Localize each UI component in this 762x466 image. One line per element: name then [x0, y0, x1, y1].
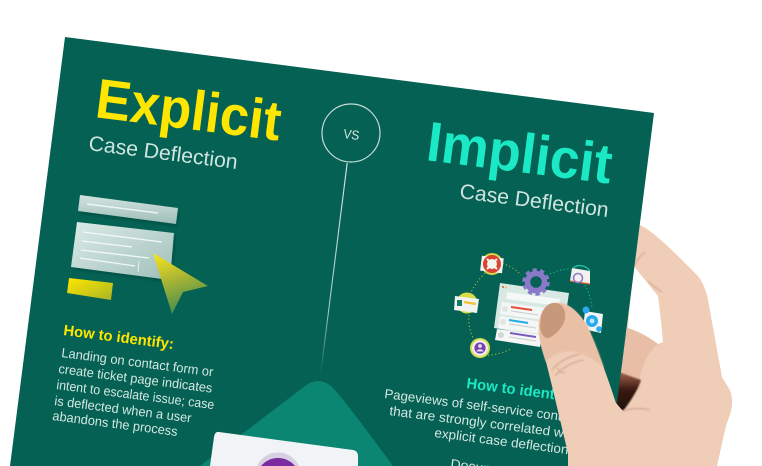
badge: user	[470, 338, 490, 358]
VS circle and divider	[320, 104, 380, 375]
icon: gear	[524, 270, 548, 294]
text block: left description: Landing on contact form or	[61, 345, 215, 379]
VS circle and divider: VS	[343, 126, 361, 143]
title: Implicit: Implicit	[423, 109, 616, 196]
text block: left description: abandons the process	[52, 408, 179, 439]
text block: right description: Pageviews of self-service content	[384, 386, 581, 426]
icon: implicit hub with badges	[454, 253, 603, 358]
text block: right description: explicit case deflection	[434, 425, 569, 457]
subtitle: Case Deflection right: Case Deflection	[458, 180, 610, 222]
subtitle: Case Deflection left: Case Deflection	[87, 132, 239, 174]
browser window	[494, 283, 569, 347]
text block: left description	[52, 345, 215, 439]
text block: left description: intent to escalate issue; case	[56, 377, 215, 412]
text block: left description: create ticket page indicates	[58, 361, 214, 396]
hand: thumb in front	[539, 303, 660, 466]
thumb shading	[539, 303, 604, 368]
text block: left description: is deflected when a user	[54, 393, 193, 426]
badge: rating	[454, 292, 479, 314]
hand behind the card	[560, 225, 732, 466]
text block: right description	[384, 386, 581, 466]
heading: How to identify right: How to identify:	[465, 375, 578, 406]
title: Explicit: Explicit	[92, 66, 285, 153]
icon: form and cursor	[67, 195, 208, 314]
heading: How to identify left: How to identify:	[62, 322, 175, 353]
white card with purple circle	[210, 432, 358, 466]
teal envelope shape	[200, 381, 393, 466]
panel: green card	[10, 37, 654, 466]
text block: right description: that are strongly correlated with	[389, 403, 579, 442]
badge: lifebuoy	[480, 253, 504, 275]
badge: chat	[582, 306, 603, 333]
badge: document search	[570, 266, 590, 284]
thumbnail	[540, 303, 565, 338]
